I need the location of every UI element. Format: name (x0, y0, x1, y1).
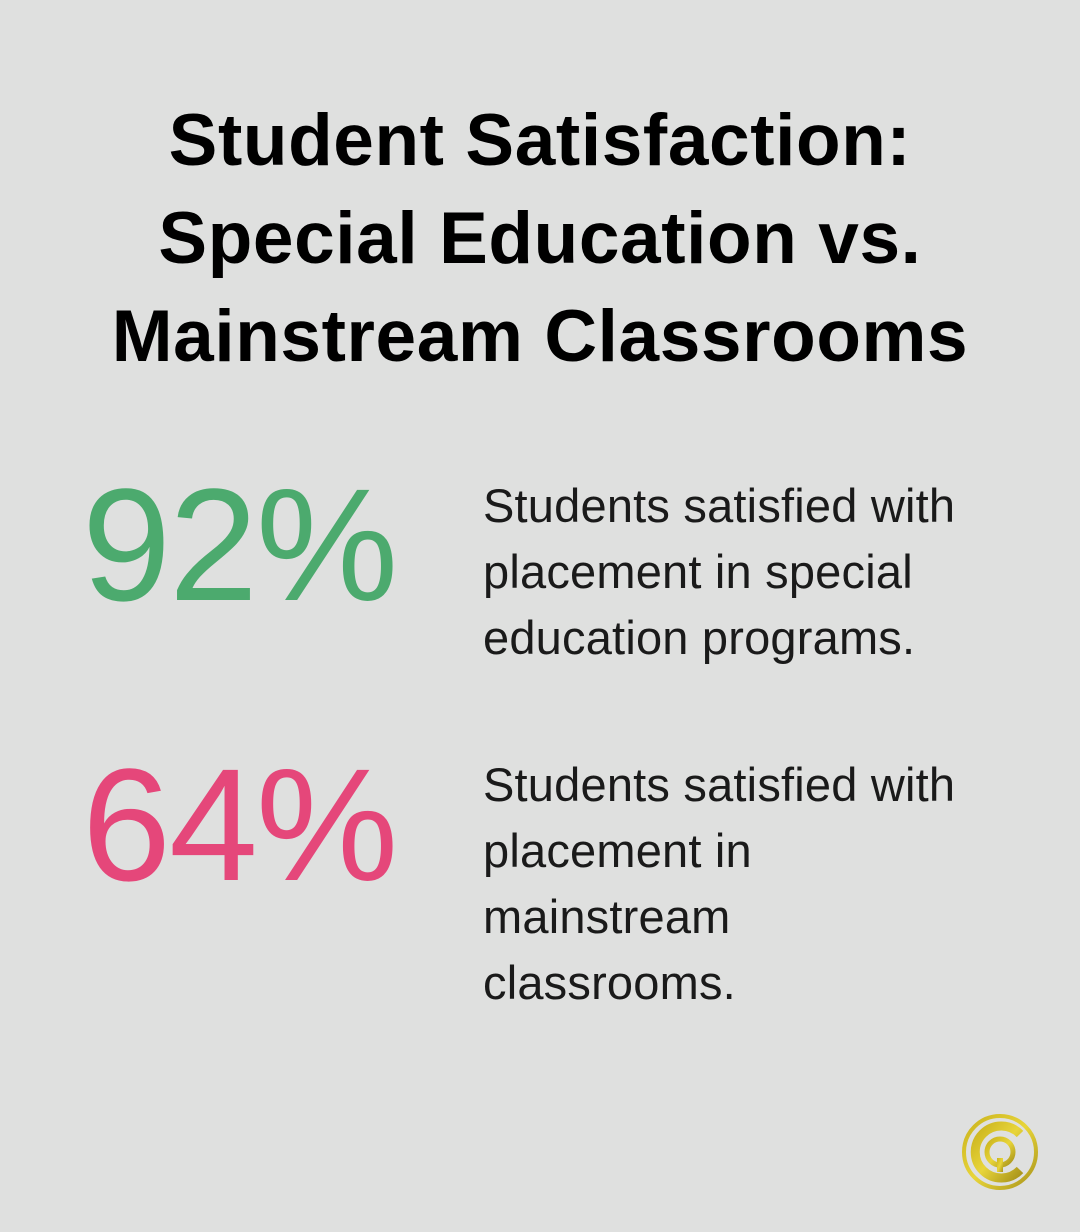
text: mainstream: mainstream (483, 890, 731, 943)
text: special education: education programs. (483, 611, 915, 664)
text: special education: placement in special (483, 545, 913, 598)
icon: logo (962, 1114, 1038, 1190)
text: mainstream (483, 758, 955, 1009)
text: special education: Students satisfied with (483, 479, 955, 532)
stat: 92%: 92% (82, 455, 396, 634)
text: mainstream: placement in (483, 824, 752, 877)
title: Mainstream Classrooms (112, 296, 968, 377)
text: mainstream: classrooms. (483, 956, 736, 1009)
text: special education (483, 479, 955, 664)
title: Student Satisfaction: (169, 100, 911, 181)
title (112, 100, 968, 377)
text: mainstream: Students satisfied with (483, 758, 955, 811)
title: Special Education vs. (158, 198, 922, 279)
stat: 64%: 64% (82, 735, 396, 914)
